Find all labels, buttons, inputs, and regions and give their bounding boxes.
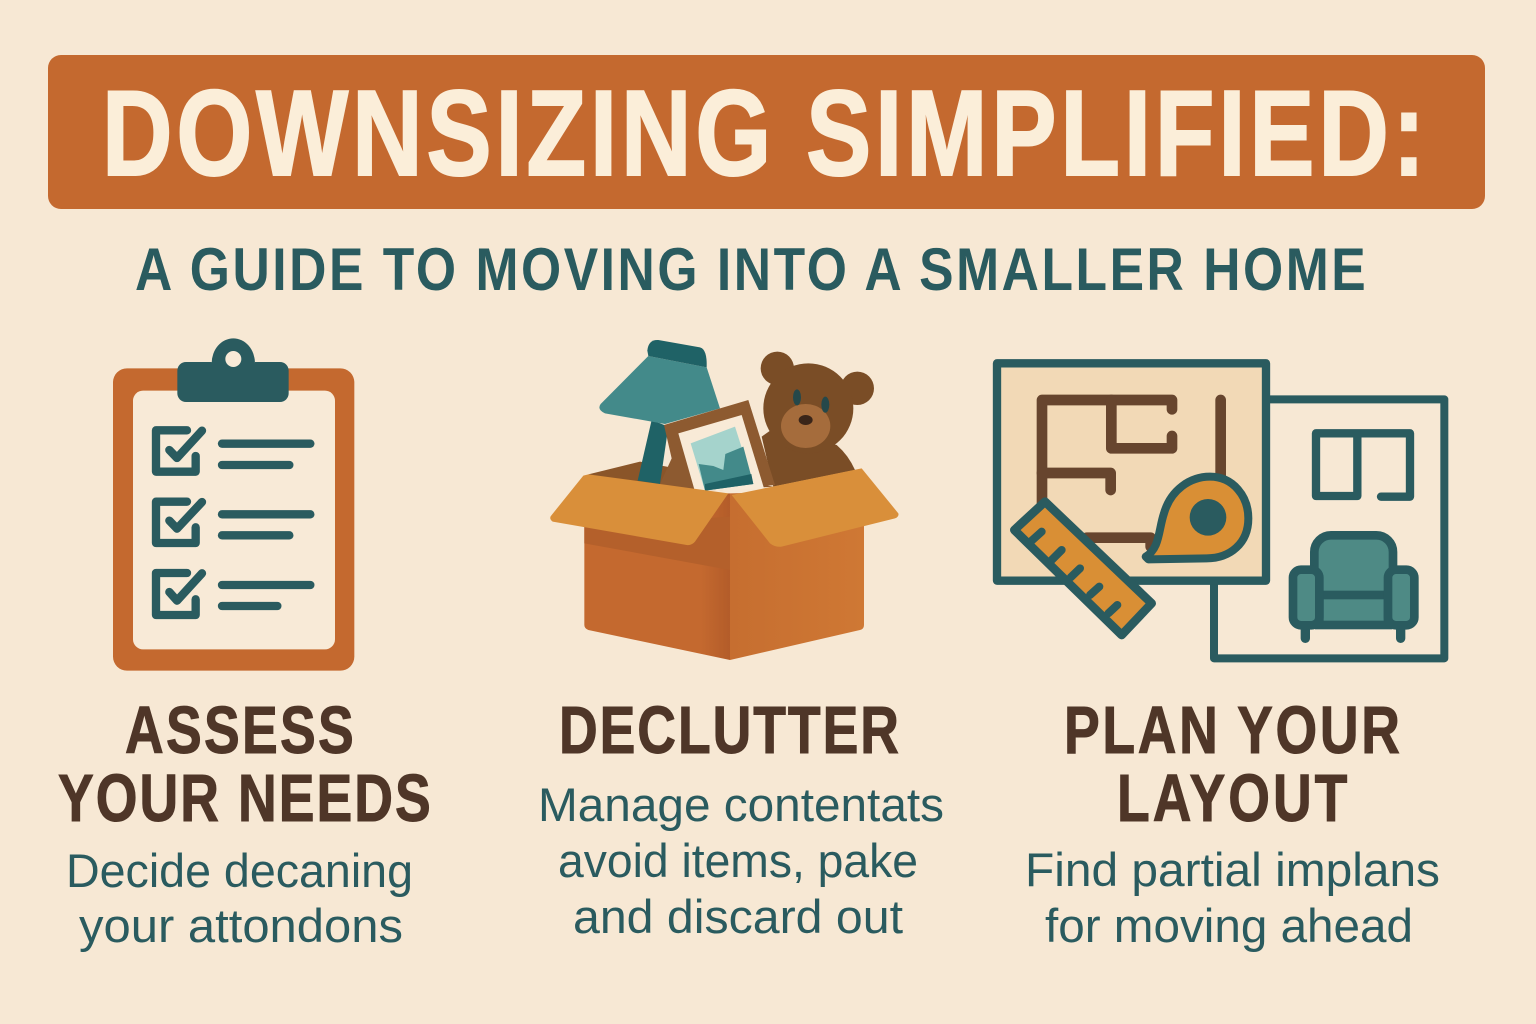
text block: assess description: Decide decaning [66, 844, 413, 897]
text block: declutter description: Manage contentats [538, 778, 944, 831]
subtitle: A GUIDE TO MOVING INTO A SMALLER HOME [135, 235, 1366, 303]
column: plan your layout [1025, 692, 1440, 952]
text block: declutter description: and discard out [573, 890, 903, 943]
heading: assess your needs: ASSESS [125, 692, 354, 767]
title: DOWNSIZING SIMPLIFIED: [102, 66, 1425, 202]
text block: assess description: your attondons [79, 899, 403, 952]
heading: assess your needs [58, 692, 431, 835]
text block: declutter description: avoid items, pake [558, 834, 918, 887]
icon: floor plan with ruler, pin and armchair [997, 363, 1444, 658]
heading: plan your layout [1064, 692, 1400, 835]
text block: declutter description [538, 778, 944, 943]
title banner [48, 55, 1485, 209]
text block: plan description: Find partial implans [1025, 843, 1440, 896]
text block: plan description [1025, 843, 1440, 952]
heading: assess your needs: YOUR NEEDS [58, 760, 431, 835]
heading: plan your layout: PLAN YOUR [1064, 692, 1400, 767]
heading: plan your layout: LAYOUT [1117, 760, 1347, 835]
icon: clipboard checklist [113, 338, 354, 671]
icon: moving box with lamp, frame and teddy bear [550, 340, 899, 660]
heading: declutter: DECLUTTER [559, 692, 899, 767]
column: assess your needs [58, 692, 431, 952]
text block: assess description [66, 844, 413, 952]
text block: plan description: for moving ahead [1045, 899, 1413, 952]
column: declutter [538, 692, 944, 943]
